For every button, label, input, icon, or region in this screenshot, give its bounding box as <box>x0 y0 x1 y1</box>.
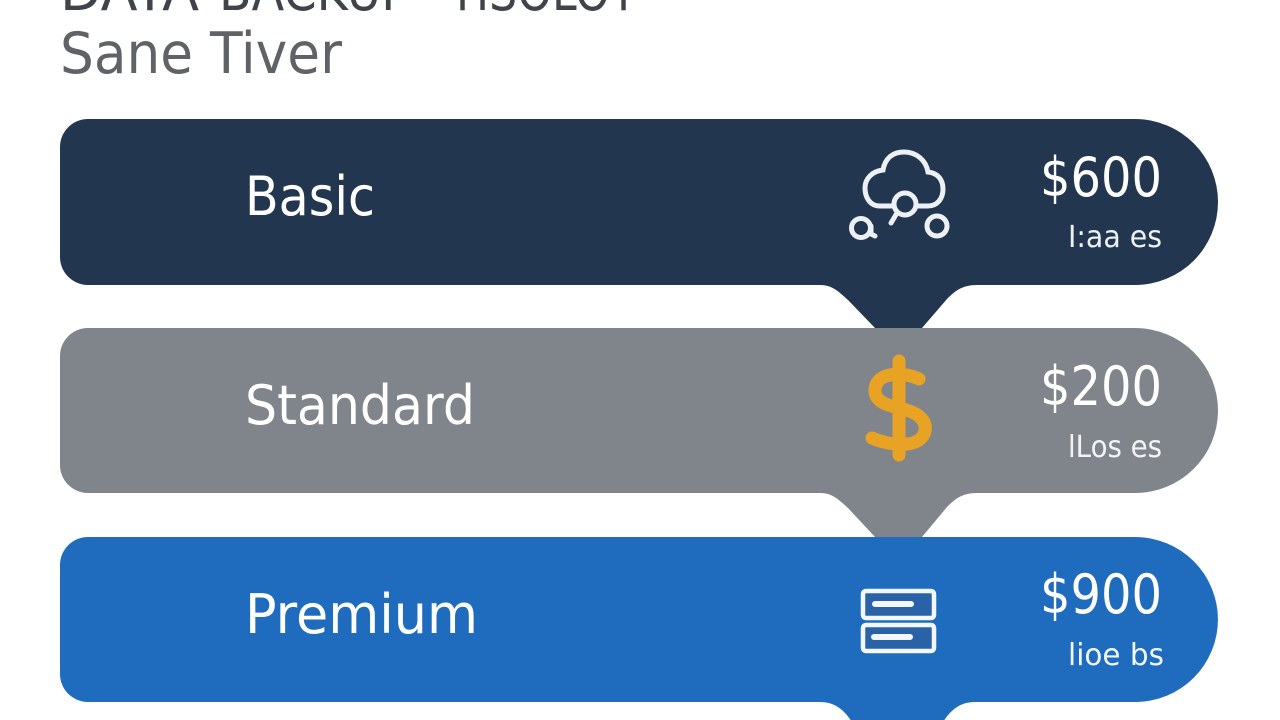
price: standard: $200 <box>1040 355 1162 418</box>
title: Sane Tiver <box>60 21 343 87</box>
icon: dollar sign <box>872 361 925 455</box>
icon: cloud with search and nodes <box>852 152 947 238</box>
tier name: premium: Premium <box>245 583 478 646</box>
tier name: standard: Standard <box>245 374 475 437</box>
caption: premium: lioe bs <box>1068 638 1164 673</box>
tier name: basic: Basic <box>245 165 375 228</box>
panel: standard <box>60 328 1218 537</box>
panel: premium <box>60 537 1218 720</box>
caption: basic: I:aa es <box>1068 220 1162 255</box>
price: basic: $600 <box>1040 146 1162 209</box>
price: premium: $900 <box>1040 563 1162 626</box>
caption: standard: lLos es <box>1068 430 1162 465</box>
icon: server <box>863 591 934 651</box>
title <box>60 0 638 87</box>
panel: basic <box>60 119 1218 328</box>
